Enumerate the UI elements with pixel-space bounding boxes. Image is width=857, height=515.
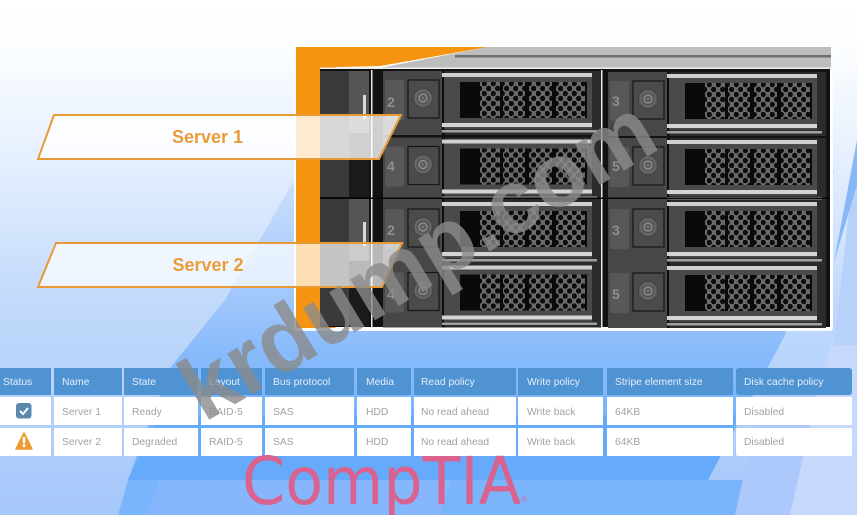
drive: server 1 bay 2: 2 xyxy=(387,94,395,110)
icon: degraded warning xyxy=(16,433,32,449)
callout: Server 1 xyxy=(38,115,401,159)
table row: Server 1: Disabled xyxy=(744,407,784,418)
table row: Server 2: Disabled xyxy=(744,437,784,448)
drive: server 2 bay 3 xyxy=(608,200,826,264)
table: disk groups xyxy=(0,368,852,456)
table row: Server 2: RAID-5 xyxy=(209,437,243,448)
drive: server 2 bay 4: 4 xyxy=(387,286,395,302)
table row: Server 2 xyxy=(0,428,852,456)
table row: Server 1: HDD xyxy=(366,407,388,418)
table row: Server 1: Server 1 xyxy=(62,407,101,418)
drive: server 2 bay 2 xyxy=(383,200,601,264)
table row: Server 1: Write back xyxy=(527,407,576,418)
callout: Server 2: Server 2 xyxy=(172,255,244,275)
server 1 control ear xyxy=(320,71,369,197)
table header row: Status xyxy=(3,377,32,388)
drive: server 2 bay 4 xyxy=(383,264,601,328)
panel: server chassis xyxy=(294,46,833,331)
table header row: State xyxy=(132,377,156,388)
drive: server 1 bay 3: 3 xyxy=(612,93,620,109)
drive: server 1 bay 4 xyxy=(383,138,601,202)
table row: Server 2: No read ahead xyxy=(421,437,489,448)
table row: Server 2: HDD xyxy=(366,437,388,448)
table row: Server 2: Write back xyxy=(527,437,576,448)
orange highlight frame xyxy=(294,46,833,331)
drive: server 1 bay 3 xyxy=(608,72,826,136)
table row: Server 1: 64KB xyxy=(615,407,640,418)
drive: server 2 bay 2: 2 xyxy=(387,222,395,238)
server 2 control ear xyxy=(320,199,369,326)
callout: Server 1: Server 1 xyxy=(172,127,243,147)
table row: Server 2: Server 2 xyxy=(62,437,101,448)
drive: server 2 bay 5 xyxy=(608,264,826,328)
drive: server 2 bay 5: 5 xyxy=(612,286,620,302)
table row: Server 2: Degraded xyxy=(132,437,177,448)
callout: Server 2 xyxy=(38,243,402,287)
drive: server 1 bay 5: 5 xyxy=(612,158,620,174)
table header row xyxy=(0,368,852,395)
table header row: Stripe element size xyxy=(615,377,703,388)
table row: Server 2: SAS xyxy=(273,437,294,448)
table header row: Media xyxy=(366,377,394,388)
table row: Server 1 xyxy=(0,397,852,425)
table row: Server 1: SAS xyxy=(273,407,294,418)
table row: Server 2: 64KB xyxy=(615,437,640,448)
table row: Server 1: RAID-5 xyxy=(209,407,243,418)
drive: server 1 bay 5 xyxy=(608,138,826,202)
logo: CompTIA: ® xyxy=(521,495,527,504)
chassis top lid xyxy=(380,47,831,68)
drive: server 1 bay 4: 4 xyxy=(387,158,395,174)
icon: ready check xyxy=(16,403,32,418)
table row: Server 1: No read ahead xyxy=(421,407,489,418)
table header row: Layout xyxy=(209,377,240,388)
drive: server 1 bay 2 xyxy=(383,71,601,135)
table header row: Read policy xyxy=(421,377,476,388)
table header row: Disk cache policy xyxy=(744,377,824,388)
drive: server 2 bay 3: 3 xyxy=(612,222,620,238)
table header row: Name xyxy=(62,377,90,388)
table header row: Write policy xyxy=(527,377,581,388)
table header row: Bus protocol xyxy=(273,377,330,388)
watermark: krdump.com xyxy=(163,79,673,440)
table row: Server 1: Ready xyxy=(132,407,163,418)
